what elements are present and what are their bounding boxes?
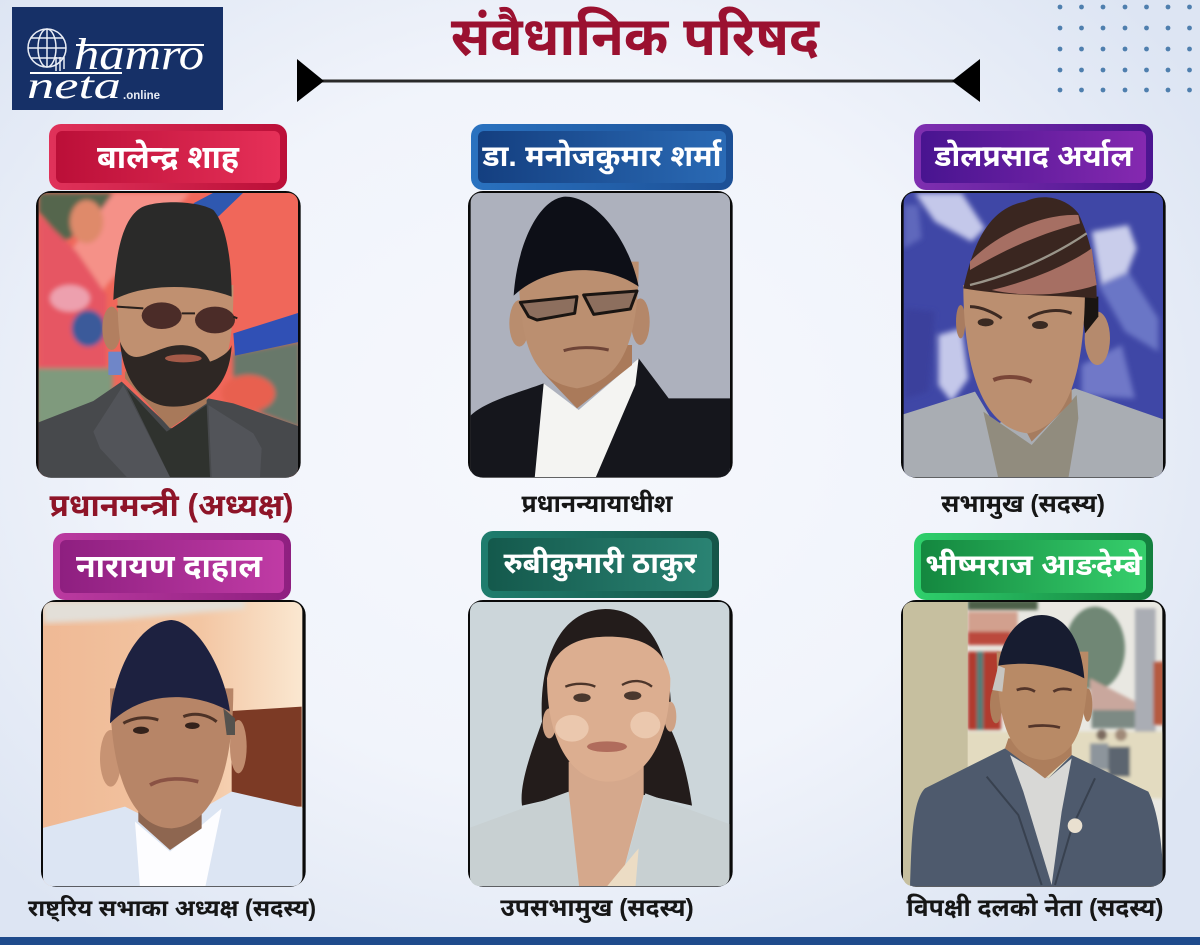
- name badge: [914, 533, 1153, 600]
- logo: neta: [27, 65, 121, 107]
- name badge: भीष्मराज आङदेम्बे: [925, 549, 1142, 582]
- name badge: [471, 124, 733, 190]
- panel: Rubi Kumari Thakur: [468, 531, 733, 923]
- icon: globe: [28, 29, 66, 71]
- role caption: सभामुख (सदस्य): [941, 491, 1105, 518]
- dot pattern: [1058, 4, 1192, 92]
- panel: Dolprasad Aryal: [901, 124, 1166, 519]
- portrait photo: [468, 191, 733, 478]
- name badge: रुबीकुमारी ठाकुर: [503, 547, 697, 580]
- logo: .online: [123, 90, 160, 102]
- name badge: [481, 531, 719, 598]
- name badge: [49, 124, 287, 190]
- logo: [12, 7, 223, 110]
- name badge: डोलप्रसाद अर्याल: [934, 140, 1133, 173]
- role caption: राष्ट्रिय सभाका अध्यक्ष (सदस्य): [28, 896, 316, 922]
- role caption: प्रधानमन्त्री (अध्यक्ष): [49, 487, 294, 523]
- role caption: विपक्षी दलको नेता (सदस्य): [907, 895, 1163, 922]
- name badge: नारायण दाहाल: [76, 548, 262, 584]
- portrait photo: [468, 600, 733, 887]
- name badge: बालेन्द्र शाह: [97, 139, 239, 175]
- panel: Balendra Shah: [36, 124, 301, 523]
- panel: Narayan Dahal: [28, 533, 316, 922]
- name badge: [914, 124, 1153, 190]
- name badge: [53, 533, 291, 600]
- portrait photo: [901, 191, 1166, 478]
- arrow: double-headed title rule: [297, 59, 980, 102]
- title: संवैधानिक परिषद: [451, 8, 819, 67]
- portrait photo: [901, 600, 1166, 887]
- role caption: प्रधानन्यायाधीश: [521, 491, 673, 518]
- logo: hamro: [74, 30, 204, 79]
- role caption: उपसभामुख (सदस्य): [500, 895, 694, 922]
- portrait photo: [36, 191, 301, 478]
- panel: Bhishmaraj Angdembe: [901, 533, 1166, 922]
- name badge: डा. मनोजकुमार शर्मा: [482, 140, 722, 173]
- panel: Manoj Kumar Sharma: [468, 124, 733, 518]
- footer bar: [0, 937, 1200, 945]
- portrait photo: [41, 600, 306, 887]
